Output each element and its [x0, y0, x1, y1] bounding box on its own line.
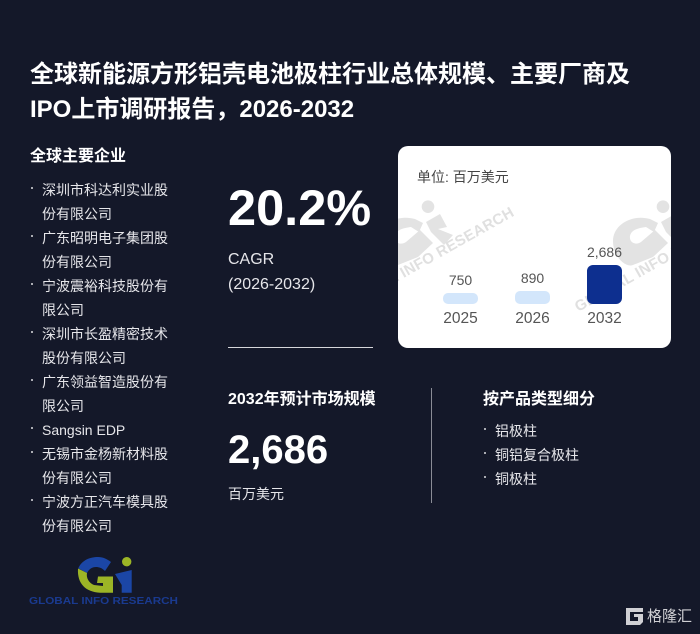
company list: 限公司 [42, 398, 84, 414]
title: IPO上市调研报告，2026-2032 [30, 96, 354, 123]
bar: 2026: 890 [521, 270, 544, 286]
watermark: Gelonghui: 格隆汇 [647, 608, 692, 625]
watermark: Gelonghui [626, 608, 692, 625]
CAGR value: 20.2% [228, 179, 371, 236]
product types list: 铝极柱 [495, 423, 537, 439]
company list: 份有限公司 [42, 470, 112, 486]
company list: 深圳市长盈精密技术 [42, 326, 168, 342]
product types list [484, 423, 579, 487]
company list: 广东领益智造股份有 [42, 374, 168, 390]
bar: 2032: 2,686 [587, 244, 622, 260]
bar: 2025: 2025 [443, 310, 478, 327]
stat: CAGR [228, 179, 371, 293]
company list: Sangsin EDP [42, 422, 125, 438]
logo mark [78, 557, 132, 593]
CAGR label [228, 251, 315, 293]
company list: 份有限公司 [42, 206, 112, 222]
company list [31, 182, 168, 534]
bar: 2025: 750 [449, 272, 472, 288]
company list: 宁波方正汽车模具股 [42, 494, 168, 510]
title [30, 61, 630, 123]
panel: product types [483, 390, 595, 487]
bar: 2026 [515, 270, 550, 327]
company list: 股份有限公司 [42, 350, 126, 366]
icon: G mark [626, 608, 643, 625]
company list: 份有限公司 [42, 254, 112, 270]
company list: 宁波震裕科技股份有 [42, 278, 168, 294]
watermark [398, 200, 671, 315]
market size heading: 2032年预计市场规模 [228, 391, 376, 408]
heading: major companies: 全球主要企业 [30, 148, 126, 165]
company list: 广东昭明电子集团股 [42, 230, 168, 246]
bar: 2032 [587, 244, 622, 327]
market size value: 2,686 [228, 428, 328, 472]
CAGR label: CAGR [228, 251, 274, 268]
company list: 限公司 [42, 302, 84, 318]
company list: 份有限公司 [42, 518, 112, 534]
chart unit label: 单位: 百万美元 [417, 169, 509, 185]
panel: major companies [30, 147, 168, 534]
market size unit: 百万美元 [228, 486, 284, 502]
company list: 深圳市科达利实业股 [42, 182, 168, 198]
panel: 2032 market size [228, 390, 376, 502]
product types heading: 按产品类型细分 [483, 391, 595, 408]
title: 全球新能源方形铝壳电池极柱行业总体规模、主要厂商及 [30, 61, 630, 88]
product types list: 铜铝复合极柱 [495, 447, 579, 463]
logo: Global Info Research [29, 557, 178, 607]
bar: 2025 [443, 272, 478, 327]
panel: bar chart card [398, 146, 671, 348]
logo wordmark: GLOBAL INFO RESEARCH [29, 595, 178, 607]
bar: 2026: 2026 [515, 310, 550, 327]
CAGR label: (2026-2032) [228, 276, 315, 293]
bar: 2032: 2032 [587, 310, 622, 327]
company list: 无锡市金杨新材料股 [42, 446, 168, 462]
product types list: 铜极柱 [495, 471, 537, 487]
